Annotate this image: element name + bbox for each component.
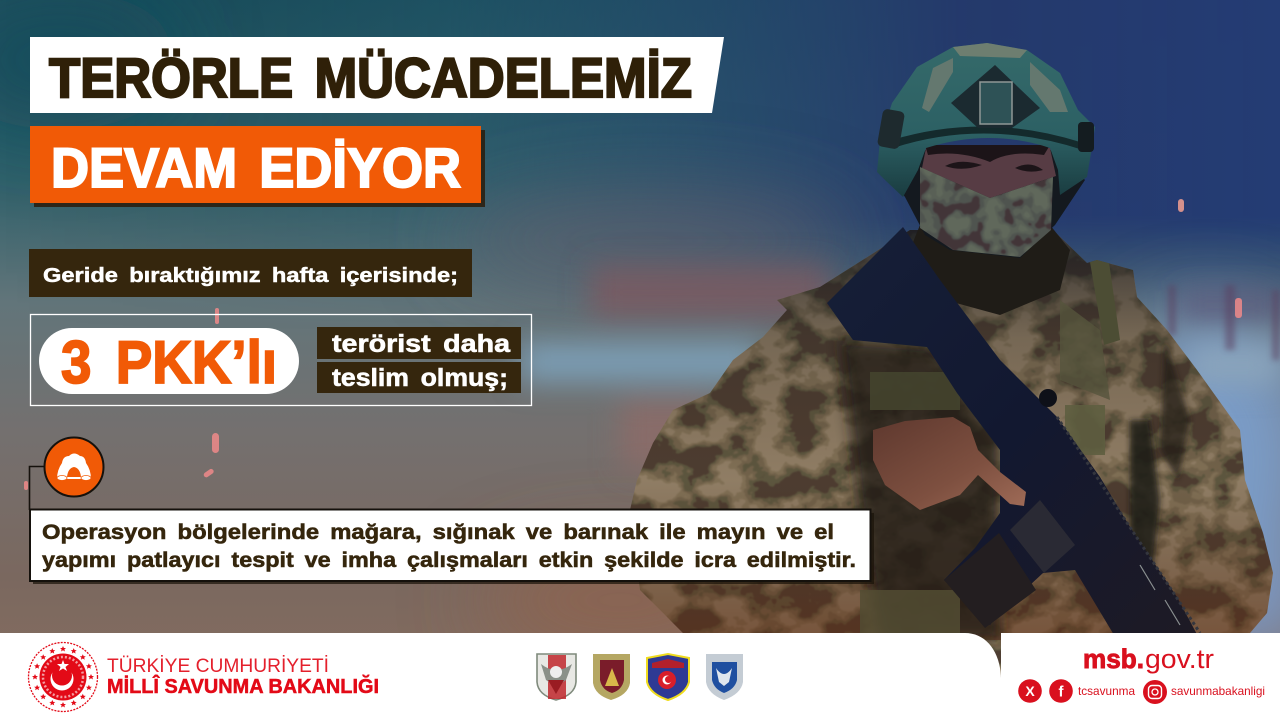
badge: air forces xyxy=(706,654,743,700)
handle: tcsavunma: tcsavunma xyxy=(1078,684,1135,698)
callout: operations text: yapımı patlayıcı tespit ve imha çalışmaları etkin şekilde icra edilmiştir. xyxy=(42,548,856,572)
spark particles xyxy=(24,199,1242,490)
website: gov.tr xyxy=(1145,644,1214,674)
logo: ministry emblem xyxy=(28,642,98,712)
callout: operations text: Operasyon bölgelerinde mağara, sığınak ve barınak ile mayın ve el xyxy=(42,520,834,544)
pill: 3 PKK'lı: 3 PKK’lı xyxy=(61,329,277,396)
website: msb. xyxy=(1083,644,1144,674)
icon: instagram xyxy=(1143,680,1167,704)
ministry name: MİLLÎ SAVUNMA BAKANLIĞI xyxy=(107,674,379,698)
ministry name: TÜRKİYE CUMHURİYETİ xyxy=(107,656,329,677)
label: teslim olmuş: teslim olmuş; xyxy=(332,364,508,392)
label: terörist daha: terörist daha xyxy=(332,330,511,358)
helmet xyxy=(877,43,1095,197)
footer: white band right xyxy=(1001,633,1280,720)
helmet strap shadow xyxy=(885,150,1085,258)
callout: operations text xyxy=(30,510,874,584)
panel: surrendered count xyxy=(30,314,532,406)
website xyxy=(1083,644,1214,674)
subtitle: orange banner: DEVAM EDİYOR xyxy=(51,136,461,199)
icon: cave xyxy=(44,438,104,496)
icon: facebook xyxy=(1049,679,1073,703)
ministry name xyxy=(107,656,379,698)
badge: land forces xyxy=(593,654,630,700)
hand gripping rifle xyxy=(873,417,1026,510)
icon: X: X xyxy=(1025,683,1035,699)
rifle xyxy=(827,227,1200,640)
intro text bar xyxy=(29,249,472,297)
soldier body: camouflage uniform xyxy=(630,230,1273,674)
icon: X xyxy=(1018,679,1042,703)
soldier photo illustration xyxy=(600,43,1280,720)
badge: general staff xyxy=(537,654,576,700)
footer: white band left xyxy=(0,633,1001,720)
title: white banner: TERÖRLE MÜCADELEMİZ xyxy=(49,46,692,109)
face xyxy=(922,148,1056,198)
handle: savunmabakanligi: savunmabakanligi xyxy=(1171,684,1265,698)
icon: facebook: f xyxy=(1058,684,1064,700)
neck scarf xyxy=(905,225,1070,315)
camouflage face mask xyxy=(920,167,1053,257)
intro text bar: Geride bıraktığımız hafta içerisinde; xyxy=(43,265,458,287)
label: terörist daha xyxy=(317,327,521,359)
eyes and brows xyxy=(925,145,1050,172)
connector line xyxy=(30,466,44,510)
badge: naval forces xyxy=(647,654,689,700)
